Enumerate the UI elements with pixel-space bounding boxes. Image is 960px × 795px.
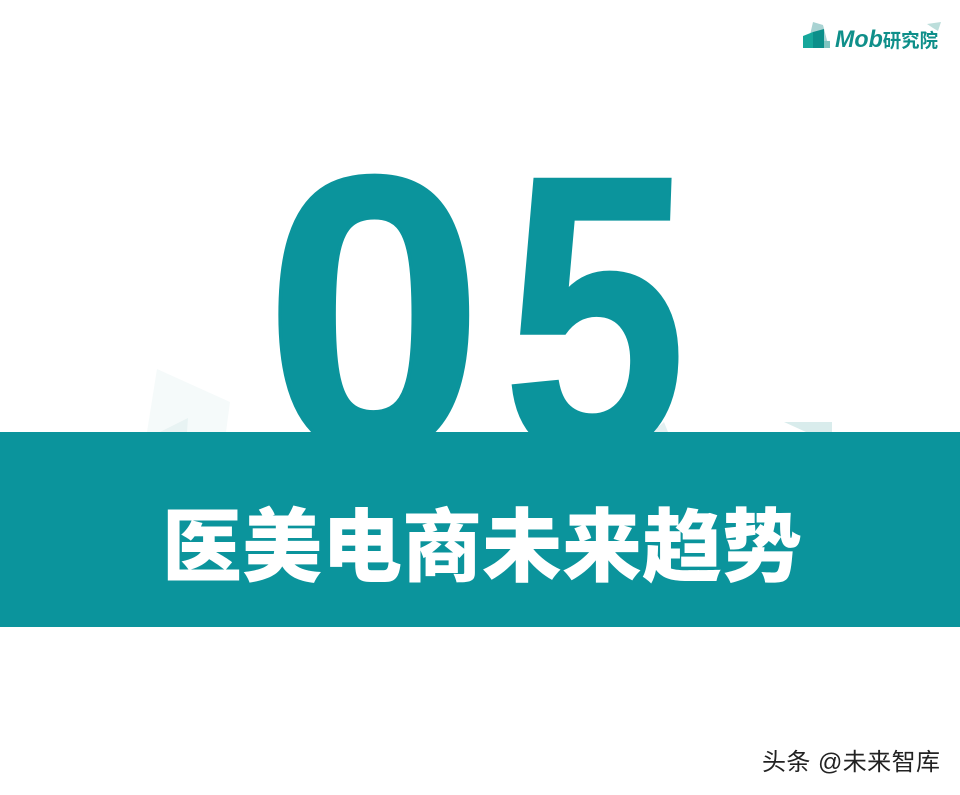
faint background shapes — [147, 369, 832, 432]
logo icon — [803, 22, 941, 48]
title: 医美电商未来趋势 — [162, 503, 802, 592]
logo: Mob研究院 — [803, 22, 941, 53]
logo text: Mob研究院 — [835, 26, 938, 53]
section number — [264, 92, 696, 539]
watermark: 头条 @未来智库 — [762, 749, 940, 776]
digit 5: 5 — [497, 92, 696, 539]
title band — [0, 432, 960, 627]
digit 0: 0 — [264, 95, 484, 535]
